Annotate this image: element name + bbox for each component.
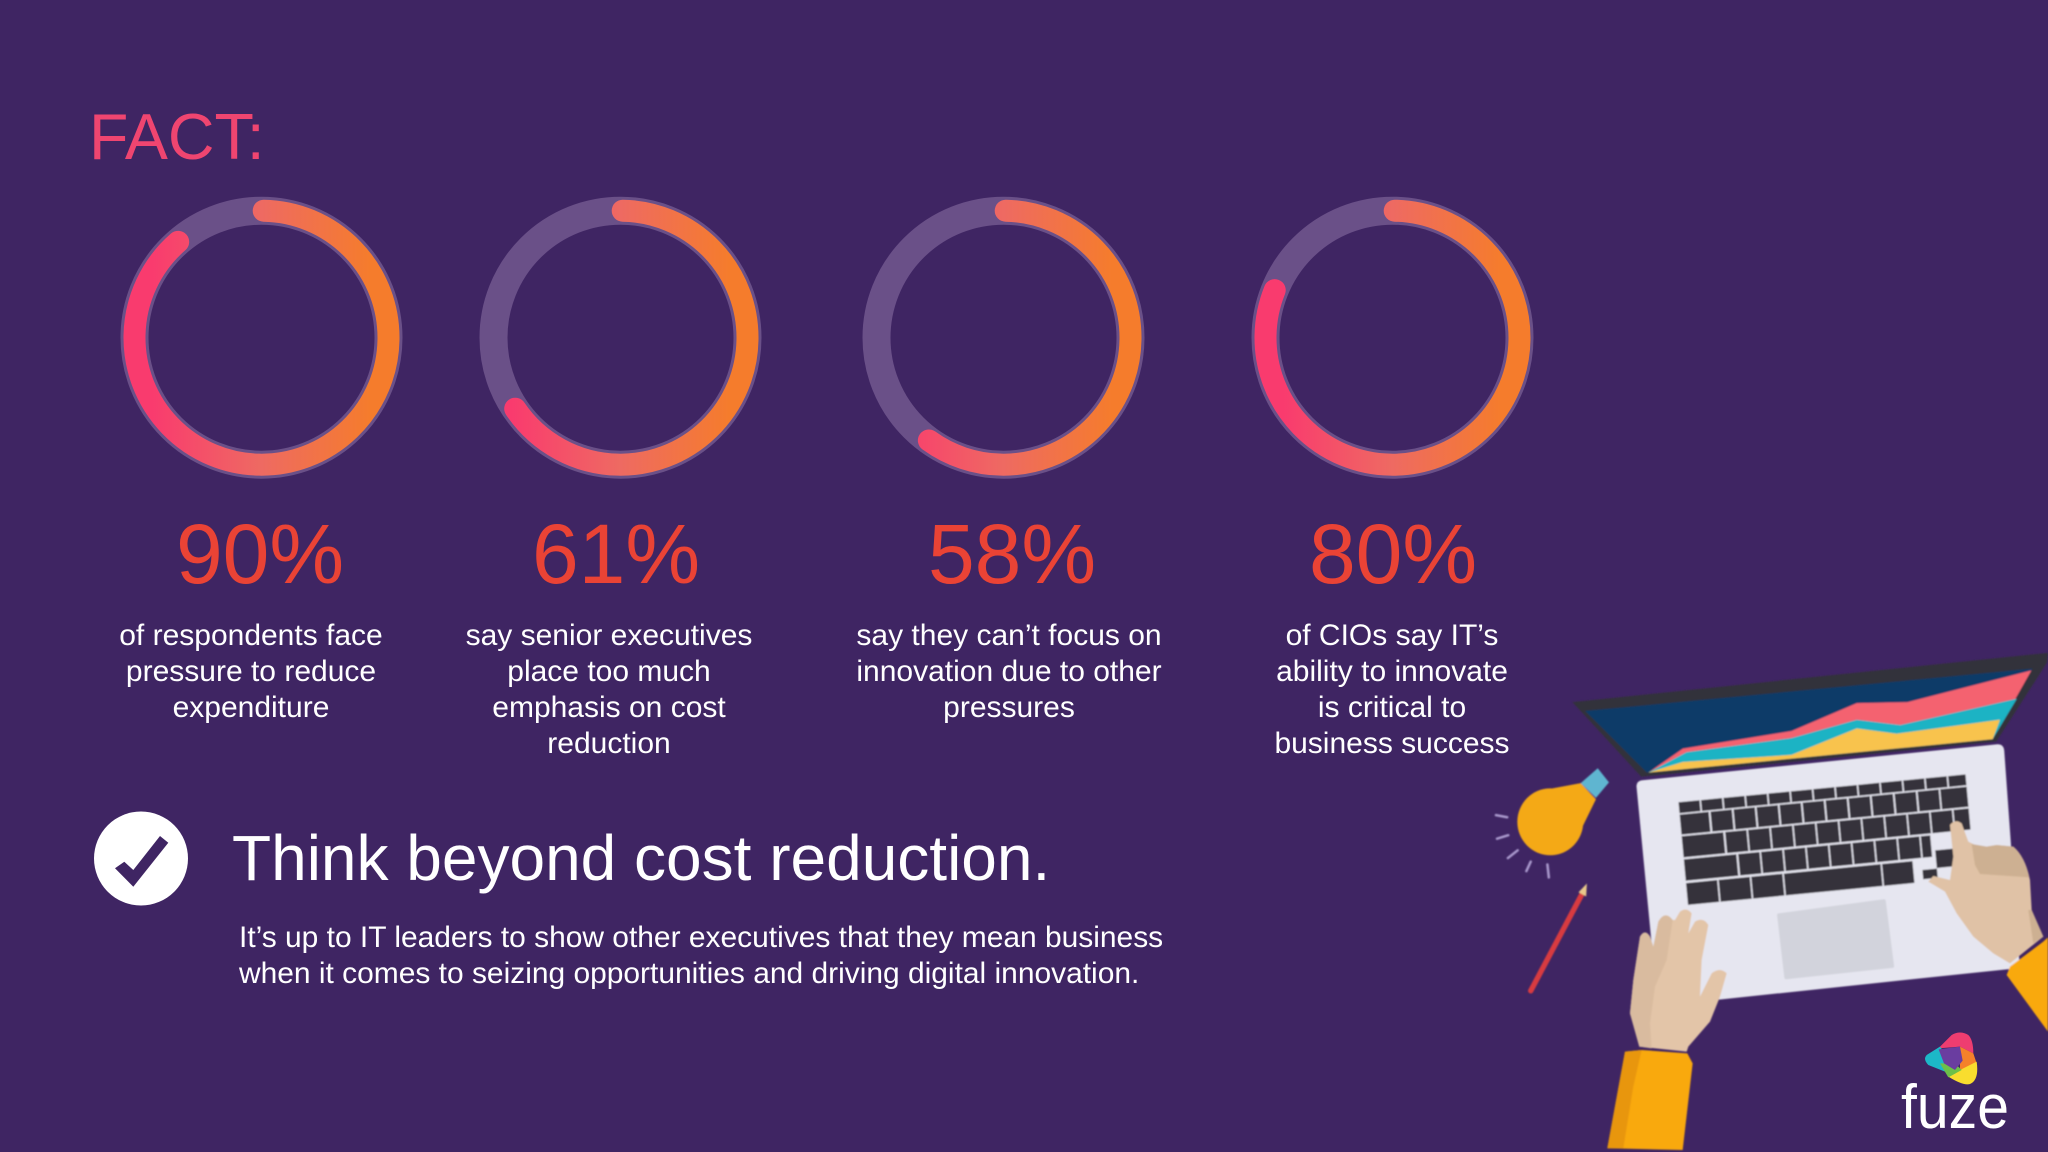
logo mark	[1925, 1032, 1977, 1084]
value: 90%: 90%	[176, 507, 344, 601]
panel: stat 61%	[466, 209, 752, 760]
laptop body and desk items	[1496, 653, 2048, 1005]
description: reduction	[547, 727, 671, 760]
description: expenditure	[173, 691, 329, 724]
keyboard	[1679, 780, 1974, 898]
panel: stat 80%	[1263, 209, 1522, 760]
value: 58%: 58%	[928, 507, 1096, 601]
heading: Think beyond cost reduction.	[232, 822, 1050, 894]
donut chart: 80%	[1263, 209, 1522, 467]
body text: when it comes to seizing opportunities and driving digital innovation.	[238, 957, 1139, 990]
illustration: laptop, hands, bulb and pencil	[1496, 653, 2048, 1150]
trackpad	[1779, 901, 1892, 977]
description: business success	[1274, 727, 1510, 760]
description: say they can’t focus on	[856, 619, 1162, 652]
bulb rays	[1496, 815, 1549, 877]
icon: pencil	[1531, 883, 1587, 991]
description: innovation due to other	[856, 655, 1162, 688]
description: place too much	[507, 655, 711, 688]
logo wordmark: fuze	[1901, 1073, 2009, 1142]
right sleeve	[2007, 937, 2048, 1032]
right hand	[1928, 821, 2048, 1032]
donut chart: 90%	[132, 209, 391, 467]
description: ability to innovate	[1276, 655, 1508, 688]
laptop screen	[1585, 669, 2033, 773]
panel: stat 90%	[119, 209, 391, 724]
donut chart: 61%	[491, 209, 750, 467]
description: say senior executives	[466, 619, 752, 652]
value: 80%: 80%	[1309, 507, 1477, 601]
description: emphasis on cost	[492, 691, 726, 724]
description: of CIOs say IT’s	[1286, 619, 1498, 652]
body text: It’s up to IT leaders to show other executives that they mean business	[239, 921, 1163, 954]
screen chart	[1648, 670, 2031, 773]
title: FACT:	[89, 101, 265, 173]
donut chart: 58%	[874, 209, 1133, 467]
laptop base	[1637, 744, 2020, 1005]
left hand	[1607, 910, 1727, 1150]
description: pressure to reduce	[126, 655, 376, 688]
description: of respondents face	[119, 619, 383, 652]
left sleeve	[1607, 1050, 1693, 1150]
laptop lid	[1572, 653, 2048, 777]
value: 61%: 61%	[532, 507, 700, 601]
panel: stat 58%	[856, 209, 1162, 724]
description: is critical to	[1318, 691, 1466, 724]
icon: check mark	[94, 812, 188, 906]
icon: light bulb	[1517, 768, 1609, 855]
description: pressures	[943, 691, 1075, 724]
